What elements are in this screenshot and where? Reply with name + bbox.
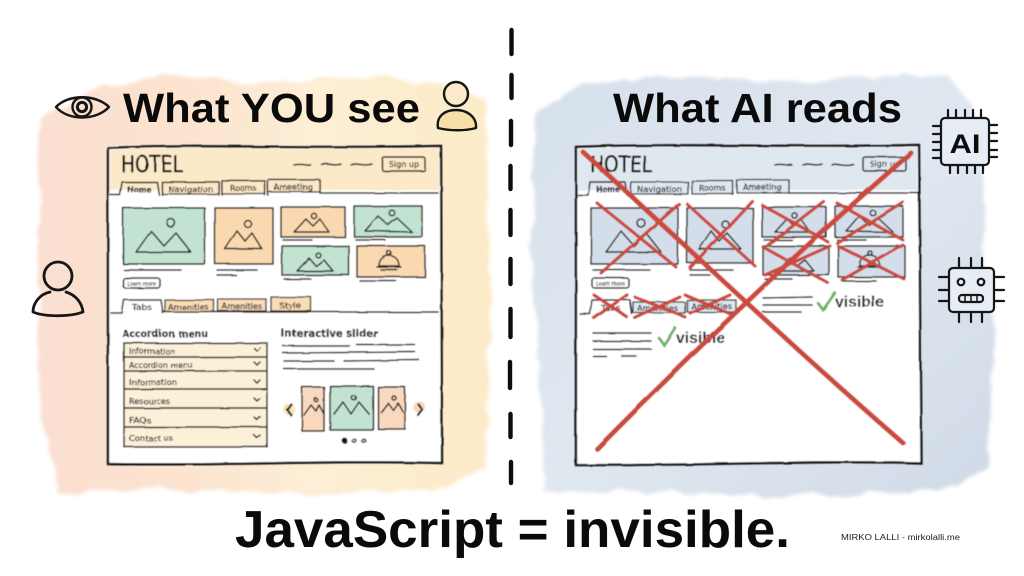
panel: wireframe what AI reads bbox=[576, 145, 921, 465]
header wash bbox=[110, 148, 439, 190]
image card 6 bbox=[838, 246, 905, 281]
logo: HOTEL bbox=[590, 153, 653, 178]
second tabs: Amenities bbox=[168, 303, 209, 312]
icon: user on the left bbox=[33, 262, 83, 316]
top tabs: Navigation bbox=[168, 185, 213, 194]
accordion heading: Accordion menu bbox=[122, 329, 208, 340]
divider: dashed line bbox=[510, 30, 512, 483]
second tabs: Amenities bbox=[637, 304, 678, 313]
image card 3 bbox=[281, 207, 345, 240]
top tabs: Ameeting bbox=[743, 183, 782, 192]
header squiggles bbox=[775, 164, 853, 165]
image card 2 bbox=[687, 208, 753, 275]
accordion menu: Resources bbox=[129, 397, 170, 406]
accordion menu: Information bbox=[129, 378, 177, 387]
visible block 2: visible bbox=[676, 330, 725, 347]
second tabs: Tabs bbox=[600, 304, 621, 313]
icon: user beside heading bbox=[438, 82, 476, 130]
second tabs: Amenities bbox=[691, 302, 732, 311]
icon: AI chip: AI bbox=[950, 129, 980, 159]
image card 3 bbox=[762, 207, 826, 240]
sign up button bbox=[382, 157, 425, 171]
top tabs: Home bbox=[596, 185, 621, 194]
image card 2 bbox=[215, 208, 273, 275]
heading: What YOU see: What YOU see bbox=[123, 85, 420, 131]
visible block 1 bbox=[763, 293, 884, 312]
header wash bbox=[578, 147, 917, 190]
top tabs: Home bbox=[127, 185, 152, 194]
heading: What AI reads: What AI reads bbox=[613, 85, 902, 131]
slider heading: Interactive slider bbox=[281, 328, 379, 340]
accordion menu bbox=[124, 343, 267, 447]
top tabs: Rooms bbox=[230, 184, 257, 193]
accordion menu: Accordion menu bbox=[129, 361, 193, 370]
second tabs: Tabs bbox=[131, 303, 152, 312]
panel: wireframe what you see bbox=[108, 146, 442, 464]
credit: MIRKO LALLI - mirkolalli.me bbox=[841, 533, 961, 542]
second tabs: Style bbox=[279, 301, 301, 310]
image card 1 bbox=[591, 208, 678, 270]
icon: eye bbox=[56, 97, 109, 118]
header squiggles bbox=[294, 164, 372, 165]
panel: cool watercolor background bbox=[532, 74, 995, 495]
icon: AI chip bbox=[933, 110, 997, 173]
image card 1 bbox=[123, 208, 205, 270]
top tabs bbox=[110, 180, 438, 195]
learn more button bbox=[123, 278, 160, 288]
accordion menu: FAQs bbox=[129, 416, 151, 425]
image card 4 bbox=[354, 206, 422, 240]
second tabs: Amenities bbox=[222, 302, 262, 311]
learn more button: Learn more bbox=[127, 282, 157, 288]
image slider bbox=[283, 386, 425, 443]
accordion menu: Information bbox=[129, 347, 175, 356]
page frame bbox=[576, 145, 921, 465]
top tabs: Navigation bbox=[637, 185, 682, 194]
sign up button bbox=[863, 157, 906, 171]
icon: robot chip bbox=[939, 258, 1004, 322]
visible block 1: visible bbox=[835, 294, 884, 311]
learn more button bbox=[592, 278, 629, 288]
big red cross bbox=[583, 152, 911, 449]
logo: HOTEL bbox=[121, 153, 184, 178]
second tabs bbox=[111, 297, 438, 313]
image card 6 bbox=[357, 246, 425, 281]
panel: warm watercolor background bbox=[38, 74, 490, 496]
accordion menu: Contact us bbox=[129, 434, 173, 443]
top tabs: Rooms bbox=[699, 184, 726, 193]
image card 4 bbox=[835, 206, 903, 240]
page frame bbox=[108, 146, 442, 464]
sign up button: Sign up bbox=[870, 160, 900, 169]
visible block 2 bbox=[593, 328, 725, 356]
footer headline: JavaScript = invisible. bbox=[235, 501, 790, 559]
sign up button: Sign up bbox=[389, 160, 419, 169]
top tabs: Ameeting bbox=[274, 183, 313, 192]
small red crosses bbox=[594, 201, 904, 318]
image card 5 bbox=[282, 246, 349, 279]
learn more button: Learn more bbox=[596, 282, 626, 288]
image card 5 bbox=[763, 246, 829, 279]
second tabs bbox=[580, 300, 736, 314]
top tabs bbox=[578, 180, 918, 195]
slider body text lines bbox=[283, 345, 419, 369]
